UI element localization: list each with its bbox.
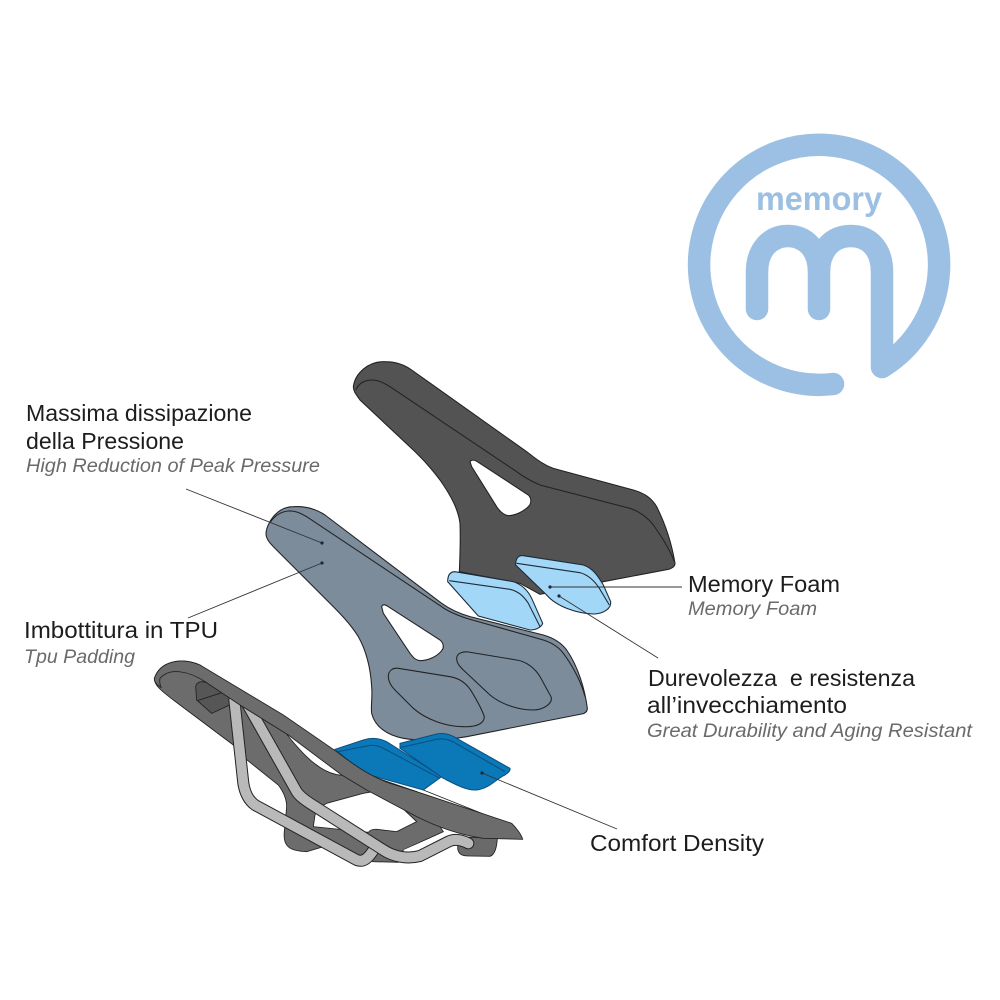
label: durability [647, 665, 974, 742]
rails [234, 700, 468, 861]
leader: comfort density [482, 773, 617, 829]
leader dots [320, 541, 561, 775]
opening in base [313, 790, 417, 832]
sliver under band [287, 735, 343, 775]
bottom saddle base [154, 661, 523, 862]
pocket crease [197, 693, 222, 701]
right rail [245, 700, 468, 857]
leader: memory foam [550, 586, 682, 588]
label: peak pressure: della Pressione [26, 428, 184, 454]
left rail [234, 700, 374, 861]
logo word: memory [756, 180, 883, 217]
top saddle shell [353, 362, 675, 594]
leader lines [186, 489, 682, 829]
label: peak pressure: Massima dissipazione [26, 400, 252, 426]
hairline above base wing [423, 790, 483, 814]
strip above right rail [403, 833, 452, 851]
right dark pad [400, 734, 510, 790]
light blue memory foam pads [448, 556, 611, 630]
base seat band [154, 661, 523, 839]
label: peak pressure: High Reduction of Peak Pressure [26, 455, 320, 477]
nose and underside structure [154, 661, 443, 862]
dark blue comfort density pads [335, 734, 510, 790]
label: TPU padding: Tpu Padding [24, 646, 135, 668]
middle TPU padding [266, 507, 587, 740]
label: TPU padding [24, 617, 218, 668]
label: memory foam: Memory Foam [688, 598, 817, 620]
label: comfort density: Comfort Density [590, 830, 765, 856]
label: durability: Great Durability and Aging Resistant [647, 720, 974, 742]
label: durability: all’invecchiamento [647, 692, 847, 718]
leader: peak pressure [186, 489, 322, 543]
top saddle inner line [356, 380, 674, 562]
rear foot [458, 837, 497, 856]
logo ring and m [699, 145, 939, 385]
left dark pad [335, 738, 442, 790]
pad recess left [388, 668, 484, 727]
label: memory foam [688, 571, 840, 620]
label: peak pressure [26, 400, 320, 477]
nose pocket [196, 682, 237, 713]
pad recess right [457, 652, 551, 710]
memory logo [699, 145, 939, 385]
middle inner line [270, 511, 585, 697]
left foam pad [448, 572, 543, 630]
label: durability: Durevolezza e resistenza [648, 665, 915, 691]
right foam pad [516, 556, 611, 614]
label: TPU padding: Imbottitura in TPU [24, 617, 218, 643]
leader: durability [559, 596, 658, 658]
leader: TPU padding [188, 563, 322, 618]
label: memory foam: Memory Foam [688, 571, 840, 597]
